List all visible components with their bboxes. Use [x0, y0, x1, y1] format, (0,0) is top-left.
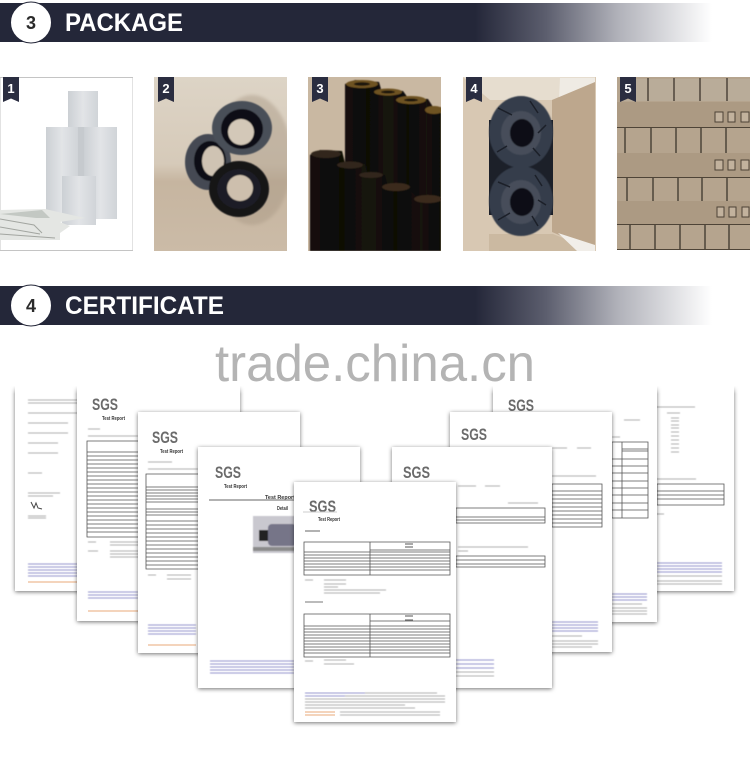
- document: test report D with product photo: Test Report: [265, 495, 295, 501]
- document: test report D with product photo: [198, 447, 360, 688]
- document: test report C: [138, 412, 300, 653]
- notes: [305, 580, 386, 593]
- badge 4: 4: [470, 81, 478, 96]
- white fade over document tops: [0, 340, 750, 394]
- section: tin: [305, 601, 323, 603]
- photo 5: stacked cartons: [617, 77, 750, 250]
- icon: number 3 circle: 3: [26, 13, 36, 33]
- banner: package: [0, 2, 712, 43]
- badge 5: [620, 77, 636, 102]
- document: test report B: [77, 378, 240, 621]
- report title: Test Report: [318, 517, 340, 523]
- document: test report H: [493, 378, 657, 622]
- document: far left letter: [15, 380, 145, 591]
- table 1: [304, 542, 450, 575]
- document: test report C: Test Report: [160, 449, 183, 455]
- icon: number 3 circle: [10, 2, 52, 43]
- badge 5: 5: [624, 81, 632, 96]
- badge 1: [3, 77, 19, 102]
- heading: certificate: CERTIFICATE: [65, 292, 224, 320]
- product photo: [253, 516, 297, 553]
- table 2: [304, 614, 450, 657]
- photo 4: rolls in a carton: [463, 77, 596, 251]
- document: test report D with product photo: SGS: [215, 463, 241, 482]
- document: test report D with product photo: Test Report: [224, 484, 247, 490]
- footer fine print: [305, 693, 445, 715]
- document: front test report E: [294, 482, 456, 722]
- document: test report G: [450, 412, 612, 652]
- badge 3: [312, 77, 328, 102]
- document: far right letter: [600, 380, 734, 591]
- banner: certificate: [0, 285, 712, 326]
- badge 1: 1: [7, 81, 15, 96]
- document: test report H: SGS: [508, 396, 534, 415]
- photo 1: white film rolls: [0, 77, 133, 250]
- SGS logo: SGS: [309, 497, 336, 516]
- document: test report F: SGS: [403, 463, 430, 482]
- badge 3: 3: [316, 81, 324, 96]
- document: test report D with product photo: Detail: [277, 506, 288, 512]
- SGS logo: SGS: [92, 395, 118, 414]
- document: test report B: Test Report: [102, 416, 125, 422]
- document: test report C: SGS: [152, 428, 178, 447]
- icon: number 4 circle: [10, 285, 52, 326]
- photo 2: black core rings: [154, 77, 292, 251]
- section: phthalates: [305, 530, 320, 532]
- badge 2: [158, 77, 174, 102]
- heading: package: PACKAGE: [65, 9, 183, 37]
- watermark: trade.china.cn: [215, 335, 535, 393]
- document: test report F: [392, 447, 552, 688]
- document: test report G: SGS: [461, 425, 487, 444]
- badge 4: [466, 77, 482, 102]
- notes 2: [305, 660, 354, 664]
- photo 3: rolls wrapped in black film: [308, 77, 443, 251]
- icon: number 4 circle: 4: [26, 296, 36, 316]
- badge 2: 2: [162, 81, 170, 96]
